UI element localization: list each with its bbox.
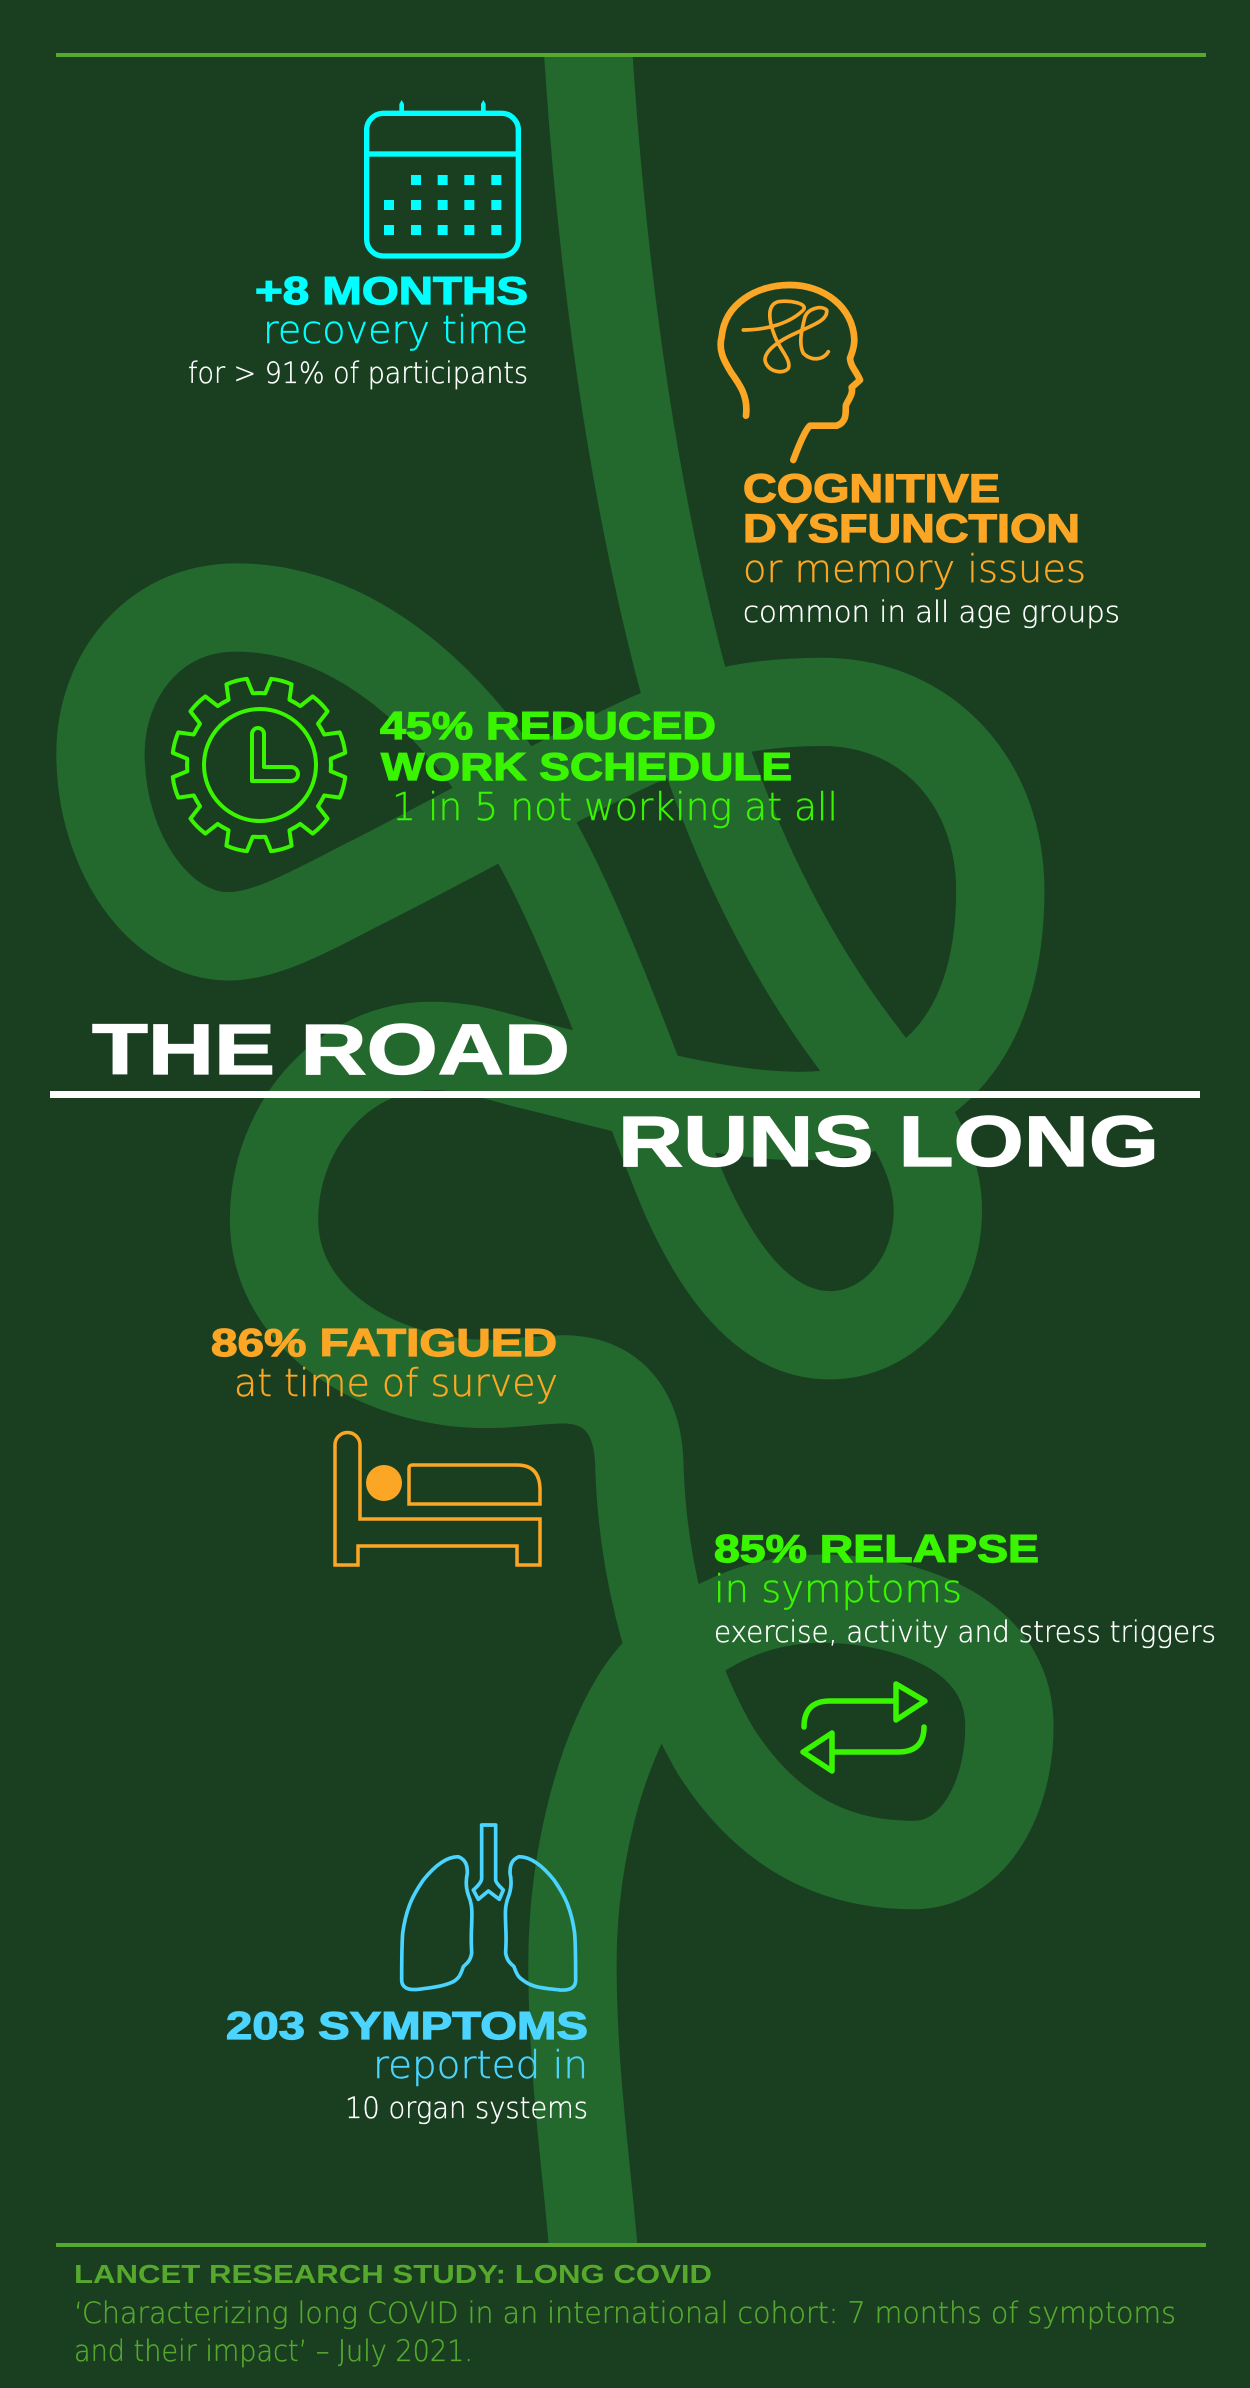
- heading: cognitive dysfunction: DYSFUNCTION: [743, 507, 1080, 551]
- subheading: not working at all: 1 in 5 not working at all: [392, 785, 838, 829]
- icon: bed: [335, 1432, 540, 1565]
- heading: 85% relapse: 85% RELAPSE: [714, 1528, 1039, 1571]
- icon: head with tangled thoughts: [721, 285, 860, 460]
- panel: fatigue: [211, 1322, 558, 1565]
- heading: 45% reduced work schedule: WORK SCHEDULE: [381, 746, 792, 789]
- subheading: memory issues: or memory issues: [743, 547, 1086, 591]
- panel: relapse: [714, 1528, 1216, 1771]
- note: organ systems: 10 organ systems: [345, 2091, 588, 2125]
- note: triggers: exercise, activity and stress triggers: [714, 1615, 1216, 1649]
- heading: 45% reduced work schedule: [380, 705, 792, 789]
- heading: cognitive dysfunction: [743, 467, 1080, 551]
- heading: 45% reduced work schedule: 45% REDUCED: [380, 705, 716, 748]
- title: [50, 1011, 1200, 1182]
- heading: 86% fatigued: 86% FATIGUED: [211, 1322, 557, 1365]
- subheading: in symptoms: in symptoms: [714, 1567, 962, 1611]
- icon: calendar: [367, 100, 518, 256]
- heading: +8 months: +8 MONTHS: [255, 270, 528, 313]
- footer: source: and their impact’ – July 2021.: [74, 2334, 473, 2368]
- heading: 203 symptoms: 203 SYMPTOMS: [226, 2005, 588, 2048]
- panel: cognitive dysfunction: [721, 285, 1120, 629]
- panel: symptoms: [226, 1825, 588, 2125]
- footer: source: LANCET RESEARCH STUDY: LONG COVID: [74, 2259, 712, 2289]
- subheading: recovery time: recovery time: [263, 308, 528, 352]
- heading: cognitive dysfunction: COGNITIVE: [743, 467, 1000, 511]
- subheading: at time of survey: at time of survey: [234, 1361, 558, 1405]
- panel: recovery time: [188, 100, 528, 390]
- subheading: reported in: reported in: [373, 2043, 588, 2087]
- icon: gear clock: [170, 676, 348, 854]
- icon: lungs: [402, 1825, 576, 1990]
- footer: source: [56, 2243, 1206, 2368]
- note: participants: for > 91% of participants: [188, 356, 528, 390]
- title: RUNS LONG: [618, 1103, 1159, 1182]
- panel: reduced work schedule: [170, 676, 838, 854]
- icon: repeat arrows: [803, 1684, 925, 1771]
- title: THE ROAD: [92, 1011, 570, 1090]
- note: age groups: common in all age groups: [743, 595, 1120, 629]
- footer: source: ‘Characterizing long COVID in an international cohort: 7 months of symptoms: [74, 2296, 1176, 2330]
- winding road: [100, 46, 1009, 2253]
